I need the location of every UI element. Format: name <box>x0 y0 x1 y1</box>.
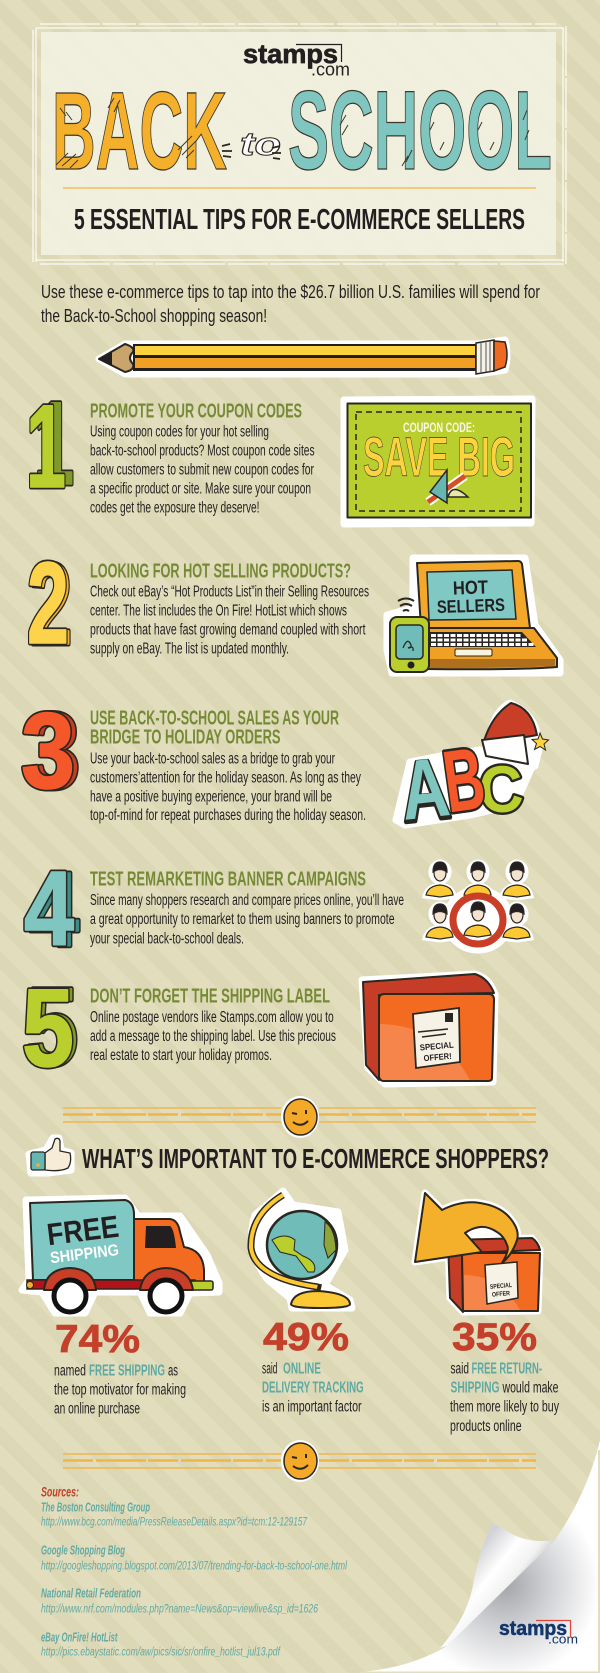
caption: said <box>262 1361 278 1378</box>
number 1: 1 <box>26 381 66 513</box>
number 4: 4 <box>29 851 79 969</box>
sources: The Boston Consulting Group <box>41 1500 150 1514</box>
panel: header <box>33 24 566 264</box>
tip 3 <box>21 690 548 840</box>
caption: products online <box>450 1418 522 1435</box>
title: to <box>222 126 281 162</box>
number 2: 2 <box>27 538 69 668</box>
logo: stamps.com footer <box>499 1618 578 1646</box>
body: Use your back-to-school sales as a bridge to grab your <box>90 750 335 767</box>
body: top-of-mind for repeat purchases during the holiday season. <box>90 807 366 824</box>
number 5: 5 <box>22 967 74 1090</box>
heading: BRIDGE TO HOLIDAY ORDERS <box>90 727 280 749</box>
caption <box>54 1363 186 1418</box>
number 1: 1 <box>34 378 74 510</box>
icon: package with label <box>362 974 495 1084</box>
body <box>90 750 366 824</box>
body <box>90 424 315 517</box>
icon: coupon: COUPON CODE: <box>403 419 475 435</box>
number 1: 1 <box>26 381 66 513</box>
title: BACK: BACK <box>52 70 227 193</box>
caption: is an important factor <box>262 1399 362 1416</box>
body: Online postage vendors like Stamps.com allow you to <box>90 1009 334 1026</box>
number 2: 2 <box>30 539 72 669</box>
logo: stamps.com footer: stamps <box>499 1618 567 1640</box>
icon: laptop and phone <box>387 558 560 673</box>
icon: truck <box>22 1198 219 1313</box>
sources: Google Shopping Blog <box>41 1543 125 1557</box>
heading <box>90 707 339 749</box>
value: 74% <box>55 1318 140 1361</box>
tip 5 <box>22 966 495 1090</box>
number 3: 3 <box>21 690 75 811</box>
icon: truck: FREE <box>45 1209 121 1252</box>
intro text <box>41 281 540 326</box>
caption <box>450 1361 559 1435</box>
divider with smiley <box>63 1440 536 1482</box>
caption: an online purchase <box>54 1401 140 1418</box>
stat: delivery tracking <box>251 1191 364 1416</box>
title: to: to <box>240 126 281 162</box>
heading: TEST REMARKETING BANNER CAMPAIGNS <box>90 869 366 891</box>
logo: stamps.com footer: .com <box>548 1632 578 1646</box>
sources: Sources: <box>41 1485 79 1500</box>
caption: DELIVERY TRACKING <box>262 1380 364 1397</box>
number 1: 1 <box>34 378 74 510</box>
icon: thumbs up <box>29 1138 71 1173</box>
number 3: 3 <box>21 690 75 811</box>
body: allow customers to submit new coupon codes for <box>90 462 314 479</box>
sources: eBay OnFire! HotList <box>41 1630 118 1644</box>
body <box>90 1009 336 1064</box>
title: BACK <box>52 70 227 193</box>
caption: ONLINE <box>283 1361 321 1378</box>
icon: return arrow and package: OFFER <box>492 1290 510 1299</box>
sources <box>41 1485 347 1659</box>
caption: named <box>54 1363 86 1380</box>
icon: laptop and phone: SELLERS <box>437 595 505 617</box>
body: products that have fast growing demand coupled with short <box>90 622 366 639</box>
stat: free return shipping <box>415 1193 559 1435</box>
sources: National Retail Federation <box>41 1586 141 1600</box>
body: codes get the exposure they deserve! <box>90 500 260 517</box>
logo: stamps.com <box>243 39 350 80</box>
sources: http://www.bcg.com/media/PressReleaseDetails.aspx?id=tcm:12-129157 <box>41 1514 308 1528</box>
body: have a positive buying experience, your brand will be <box>90 788 332 805</box>
body: a specific product or site. Make sure your coupon <box>90 481 311 498</box>
icon: ABC with santa hat: C <box>476 750 525 827</box>
icon: globe <box>251 1191 352 1308</box>
body: a great opportunity to remarket to them using banners to promote <box>90 911 395 928</box>
number 5: 5 <box>26 966 78 1089</box>
number 2: 2 <box>30 539 72 669</box>
caption: SHIPPING <box>450 1380 500 1397</box>
tip 4 <box>24 850 531 969</box>
number 3: 3 <box>26 690 80 811</box>
icon: truck: SHIPPING <box>49 1242 120 1267</box>
stat: free shipping <box>22 1198 219 1418</box>
intro text: the Back-to-School shopping season! <box>41 305 267 326</box>
number 2 <box>27 538 72 669</box>
logo: stamps.com: .com <box>311 60 350 80</box>
divider with smiley <box>63 1096 536 1138</box>
tip 1 <box>26 378 532 524</box>
number 5: 5 <box>22 967 74 1090</box>
body: Check out eBay’s “Hot Products List”in their Selling Resources <box>90 584 369 601</box>
icon: coupon <box>344 399 532 524</box>
number 4: 4 <box>24 850 74 968</box>
number 2: 2 <box>27 538 69 668</box>
logo: stamps.com: stamps <box>243 39 338 69</box>
icon: ABC with santa hat: B <box>437 728 491 831</box>
tip 2 <box>27 538 560 673</box>
icon: return arrow and package: SPECIAL <box>490 1282 512 1291</box>
body <box>90 892 404 947</box>
body: Since many shoppers research and compare prices online, you’ll have <box>90 892 404 909</box>
number 4: 4 <box>29 851 79 969</box>
icon: people in target ring <box>425 862 531 951</box>
caption <box>262 1361 364 1416</box>
body: real estate to start your holiday promos. <box>90 1047 272 1064</box>
caption: FREE RETURN- <box>472 1361 542 1378</box>
body: back-to-school products? Most coupon code sites <box>90 443 315 460</box>
icon: package with label: SPECIAL <box>419 1040 454 1052</box>
icon: return arrow and package <box>415 1193 540 1312</box>
page curl <box>360 1440 600 1673</box>
heading: DON’T FORGET THE SHIPPING LABEL <box>90 986 330 1008</box>
value: 35% <box>452 1316 537 1359</box>
body <box>90 584 369 658</box>
body: add a message to the shipping label. Use this precious <box>90 1028 336 1045</box>
icon: ABC with santa hat <box>396 703 548 840</box>
body: center. The list includes the On Fire! HotList which shows <box>90 603 347 620</box>
body: customers’attention for the holiday season. As long as they <box>90 769 361 786</box>
body: Using coupon codes for your hot selling <box>90 424 269 441</box>
caption: would make <box>502 1380 558 1397</box>
number 5: 5 <box>26 966 78 1089</box>
icon: ABC with santa hat: A <box>396 741 454 840</box>
icon: laptop and phone: HOT <box>453 577 489 600</box>
sources: http://pics.ebaystatic.com/aw/pics/sic/sr/onfire_hotlist_jul13.pdf <box>41 1645 281 1659</box>
caption: FREE SHIPPING <box>89 1363 165 1380</box>
body: your special back-to-school deals. <box>90 930 244 947</box>
heading: LOOKING FOR HOT SELLING PRODUCTS? <box>90 561 351 583</box>
heading: USE BACK-TO-SCHOOL SALES AS YOUR <box>90 707 339 729</box>
caption: said <box>450 1361 469 1378</box>
heading: PROMOTE YOUR COUPON CODES <box>90 401 302 423</box>
icon: ABC with santa hat: C <box>476 750 525 827</box>
number 4: 4 <box>24 850 74 968</box>
icon: ABC with santa hat: A <box>396 739 454 838</box>
body: supply on eBay. The list is updated monthly. <box>90 641 289 658</box>
icon: ABC with santa hat: B <box>437 728 491 831</box>
number 3: 3 <box>26 690 80 811</box>
caption: the top motivator for making <box>54 1382 186 1399</box>
sources: http://www.nrf.com/modules.php?name=News&op=viewlive&sp_id=1626 <box>41 1601 318 1615</box>
sources: http://googleshopping.blogspot.com/2013/07/trending-for-back-to-school-one.html <box>41 1558 347 1572</box>
icon: pencil <box>99 340 507 374</box>
icon: package with label: OFFER! <box>423 1051 452 1063</box>
caption: as <box>168 1363 178 1380</box>
value: 49% <box>263 1316 349 1359</box>
